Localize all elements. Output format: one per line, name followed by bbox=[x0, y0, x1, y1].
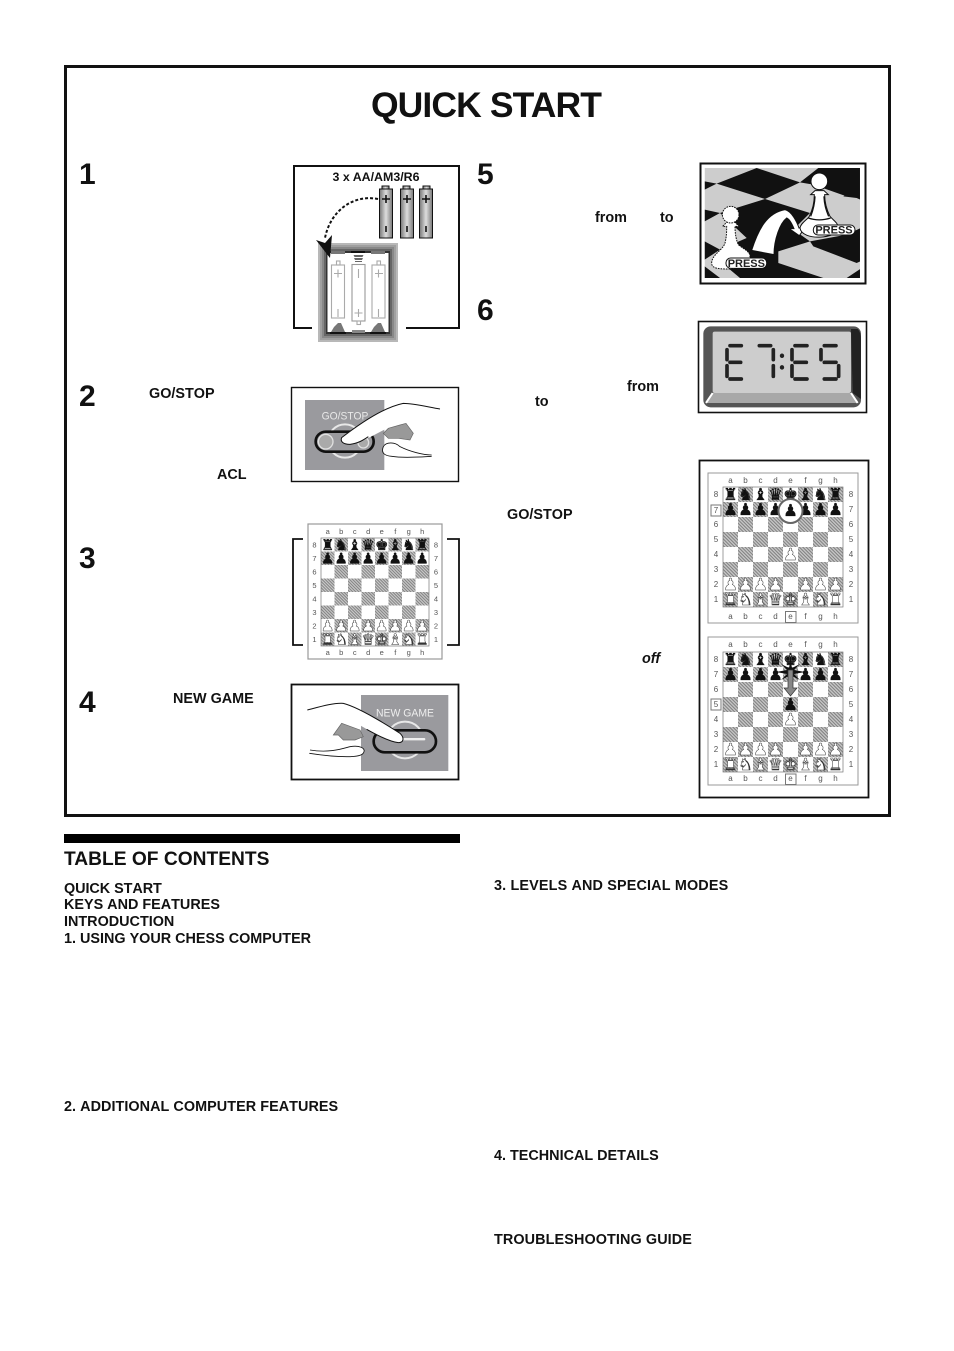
lcd digits E7:E5 bbox=[727, 346, 839, 379]
step number 3: 3 bbox=[79, 542, 96, 575]
board: white e2-e4 bbox=[708, 473, 858, 623]
contents: left column top: INTRODUCTION bbox=[64, 914, 174, 930]
icon: hand pressing bbox=[307, 703, 403, 757]
panel: battery installation bbox=[294, 166, 459, 342]
panel: starting board: 4 bbox=[312, 594, 317, 604]
board: black e7-e5: 2 bbox=[849, 745, 854, 754]
board: white e2-e4: 5 bbox=[714, 535, 719, 544]
label to: to bbox=[535, 394, 549, 410]
table of contents heading: TABLE OF CONTENTS bbox=[64, 849, 270, 870]
board: black e7-e5 bbox=[708, 637, 858, 785]
board: white e2-e4: 1 bbox=[849, 595, 854, 604]
icon: batteries bbox=[380, 186, 432, 238]
board: black e7-e5: 7 bbox=[849, 670, 854, 679]
board: white e2-e4: abcdefgh bbox=[728, 476, 838, 485]
board: black e7-e5: 8 bbox=[714, 655, 719, 664]
label ACL: ACL bbox=[217, 467, 247, 483]
panel: NEW GAME key bbox=[292, 684, 458, 780]
title: QUICK START bbox=[371, 85, 602, 125]
panel: starting board: 4 bbox=[434, 594, 438, 604]
board: black e7-e5: ♟♟♟♟♟♟♟ bbox=[723, 665, 843, 684]
panel: starting board: 3 bbox=[312, 608, 317, 617]
panel: LCD display bbox=[698, 322, 866, 412]
battery label: 3 x AA/AM3/R6 bbox=[332, 170, 420, 184]
board: white e2-e4: 3 bbox=[849, 565, 854, 574]
contents: left column top: 1. USING YOUR CHESS COMPUTER bbox=[64, 931, 312, 947]
board: white e2-e4: 4 bbox=[849, 550, 854, 559]
panel: starting board: 8 bbox=[312, 540, 317, 550]
board: white e2-e4: ♜♞♝♛♚♝♞♜ bbox=[723, 590, 843, 609]
label NEW GAME: NEW GAME bbox=[173, 691, 254, 707]
panel: GO/STOP key bbox=[292, 388, 458, 482]
panel: starting board: 6 bbox=[434, 568, 438, 576]
contents: section 2: 2. ADDITIONAL COMPUTER FEATURES bbox=[64, 1099, 339, 1115]
board: white e2-e4: 8 bbox=[714, 490, 719, 499]
board: white e2-e4: 8 bbox=[849, 490, 854, 499]
panel: demo boards bbox=[700, 460, 868, 798]
board: white e2-e4: ♜♞♝♛♚♝♞♜ bbox=[723, 485, 843, 504]
step number 5: 5 bbox=[477, 158, 494, 191]
step number 6: 6 bbox=[477, 294, 494, 327]
board: black e7-e5: ♟♟♟♟♟♟♟ bbox=[723, 740, 843, 759]
selected square e7: ♟ bbox=[783, 501, 798, 520]
panel: starting board: 6 bbox=[312, 568, 317, 576]
panel: starting board: 3 bbox=[434, 608, 438, 617]
board: black e7-e5: 7 bbox=[714, 670, 719, 679]
step number 4: 4 bbox=[79, 686, 96, 719]
contents: left column top bbox=[64, 881, 312, 947]
contents: left column top: QUICK START bbox=[64, 881, 162, 897]
panel: starting board: ♜♞♝♛♚♝♞♜ bbox=[321, 630, 429, 648]
contents: section 3: 3. LEVELS AND SPECIAL MODES bbox=[494, 878, 729, 894]
label to: to bbox=[660, 210, 674, 226]
icon: solid pawn bbox=[800, 173, 838, 237]
panel: starting board: 7 bbox=[312, 554, 317, 563]
checkerboard squares bbox=[705, 168, 864, 278]
arrow: e7 to e5 bbox=[776, 660, 805, 696]
panel: starting board: 8 bbox=[434, 540, 438, 550]
board: white e2-e4: ♟♟♟♟♟♟♟ bbox=[723, 575, 843, 594]
board: white e2-e4: 3 bbox=[714, 565, 719, 574]
panel: starting board: 2 bbox=[312, 622, 317, 630]
board: white e2-e4: 5 bbox=[849, 535, 854, 544]
panel: starting board: abcdefgh bbox=[326, 527, 424, 536]
panel: GO/STOP key: GO/STOP bbox=[322, 411, 368, 423]
board: black e7-e5: abcdefgh bbox=[728, 640, 838, 649]
board: white e2-e4: 4 bbox=[714, 550, 719, 559]
contents: left column top: KEYS AND FEATURES bbox=[64, 897, 220, 913]
panel: moving piece bbox=[700, 164, 866, 284]
step number 1: 1 bbox=[79, 158, 96, 191]
board: black e7-e5: ♜♞♝♛♚♝♞♜ bbox=[723, 650, 843, 669]
board: white e2-e4: 7 bbox=[714, 506, 719, 515]
board: white e2-e4: ♟ bbox=[783, 545, 798, 564]
icon: battery tray bbox=[318, 243, 398, 342]
panel: NEW GAME key: NEW GAME bbox=[376, 707, 434, 719]
step number 2: 2 bbox=[79, 380, 96, 413]
panel: starting board: 7 bbox=[434, 554, 438, 563]
board: white e2-e4: 2 bbox=[849, 580, 854, 589]
board: white e2-e4: ♟♟♟♟♟♟♟ bbox=[723, 500, 843, 519]
label from: from bbox=[595, 210, 627, 226]
label GO/STOP: GO/STOP bbox=[149, 386, 215, 402]
arrow: piece move bbox=[752, 210, 802, 254]
board: white e2-e4: 1 bbox=[714, 595, 719, 604]
board: black e7-e5: ♜♞♝♛♚♝♞♜ bbox=[723, 755, 843, 774]
board: black e7-e5: 3 bbox=[714, 730, 719, 739]
board: black e7-e5: 1 bbox=[714, 760, 719, 769]
label off: off bbox=[642, 651, 661, 667]
panel: starting board: ♟♟♟♟♟♟♟♟ bbox=[321, 550, 429, 568]
board: black e7-e5: abcdefgh bbox=[728, 774, 838, 783]
board: black e7-e5: 8 bbox=[849, 655, 854, 664]
board: black e7-e5: 4 bbox=[714, 715, 719, 724]
board: white e2-e4: 2 bbox=[714, 580, 719, 589]
contents: section 4: 4. TECHNICAL DETAILS bbox=[494, 1148, 659, 1164]
panel: starting board: 1 bbox=[434, 635, 438, 644]
board: white e2-e4: 6 bbox=[714, 520, 719, 529]
contents: troubleshooting: TROUBLESHOOTING GUIDE bbox=[494, 1232, 692, 1248]
label GO/STOP: GO/STOP bbox=[507, 507, 573, 523]
panel: starting board: 1 bbox=[312, 635, 317, 644]
panel: starting board bbox=[293, 524, 459, 659]
board: black e7-e5: ♟ bbox=[783, 695, 798, 714]
board: black e7-e5: 5 bbox=[849, 700, 854, 709]
label PRESS: PRESS bbox=[728, 258, 765, 270]
board: white e2-e4: 6 bbox=[849, 520, 854, 529]
panel: starting board: 2 bbox=[434, 622, 438, 630]
board: black e7-e5: 6 bbox=[849, 685, 854, 694]
board: black e7-e5: 5 bbox=[714, 700, 719, 709]
board: black e7-e5: 2 bbox=[714, 745, 719, 754]
icon: hand pressing bbox=[341, 403, 440, 457]
board: black e7-e5: ♟ bbox=[783, 710, 798, 729]
board: black e7-e5: 3 bbox=[849, 730, 854, 739]
arrow: battery to tray bbox=[316, 198, 378, 258]
board: white e2-e4: 7 bbox=[849, 505, 854, 514]
quick start frame bbox=[66, 66, 890, 816]
board: black e7-e5: 1 bbox=[849, 760, 854, 769]
board: black e7-e5: 4 bbox=[849, 715, 854, 724]
board: black e7-e5: 6 bbox=[714, 685, 719, 694]
panel: starting board: ♜♞♝♛♚♝♞♜ bbox=[321, 536, 429, 554]
board: white e2-e4: abcdefgh bbox=[728, 612, 838, 621]
panel: starting board: ♟♟♟♟♟♟♟♟ bbox=[321, 617, 429, 635]
panel: starting board: 5 bbox=[312, 581, 317, 590]
label from: from bbox=[627, 379, 659, 395]
panel: starting board: abcdefgh bbox=[326, 648, 424, 657]
panel: starting board: 5 bbox=[434, 581, 438, 590]
selected square e7 bbox=[778, 499, 802, 523]
label PRESS: PRESS bbox=[815, 225, 853, 237]
icon: dotted pawn bbox=[712, 206, 750, 269]
table of contents bar bbox=[64, 834, 460, 843]
